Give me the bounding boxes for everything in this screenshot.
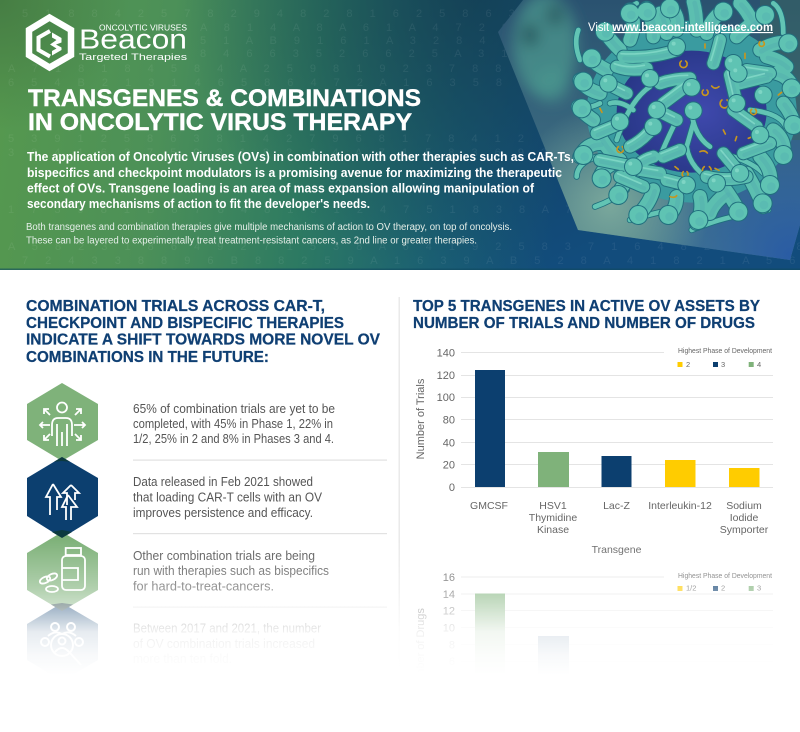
text block: ten fold: more than ten fold. [133,652,232,666]
intro bold paragraph: effect of OVs. Transgene loading is an area of mass expansion allowing manipulation of [27,180,535,196]
y axis values [437,348,455,494]
intro bold paragraph: secondary mechanisms of action to fit the developer's needs. [27,196,370,211]
category labels: GMCSF [470,500,508,512]
text block: other combinations: for hard-to-treat-cancers. [133,580,274,594]
virus illustration [575,2,796,230]
background digit pattern: 5 1 8 8 4 2 5 7 8 2 9 4 8 2 8 1 6 2 5 8 6 3 [22,8,522,20]
text block: CAR-T data: improves persistence and efficacy. [133,506,313,520]
text block: other combinations: Other combination trials are being [133,549,315,563]
background digit pattern: A 7 1 8 1 8 4 5 8 4 A 2 5 9 8 1 9 2 3 7 8 8 1 4 6 2 5 3 7 [8,63,671,75]
intro small paragraph: These can be layered to experimentally treat treatment-resistant cancers, as 2nd line or greater therapies. [26,236,477,246]
right column heading: NUMBER OF TRIALS AND NUMBER OF DRUGS [413,315,755,332]
intro bold paragraph: The application of Oncolytic Viruses (OVs) in combination with other therapies such as CAR-Ts, [27,149,574,164]
hexagon: ten fold increase [27,603,98,681]
right column heading: TOP 5 TRANSGENES IN ACTIVE OV ASSETS BY [413,298,760,315]
category labels: Thymidine [529,512,577,524]
text block: CAR-T data [133,475,323,520]
icon: people and magnifier [41,623,83,665]
left column heading: CHECKPOINT AND BISPECIFIC THERAPIES [26,315,344,332]
logo wordmark: Beacon [79,24,187,54]
text block: CAR-T data: that loading CAR-T cells with an OV [133,490,323,504]
background digit pattern: A 8 1 4 A 8 A 6 1 A 4 7 2 9 1 [200,22,538,34]
intro bold paragraph: bispecifics and checkpoint modulators is a promising avenue for maximizing the therapeutic [27,165,562,180]
y axis values: 14 [443,589,455,601]
text block: ten fold: of OV combination trials increased [133,637,315,651]
text block: other combinations: run with therapies such as bispecifics [133,564,329,578]
y axis values: 10 [443,622,455,634]
icon: bottle and pills [39,548,85,592]
banner background [0,0,800,270]
header banner [0,0,800,270]
y axis title: Number of Trials [415,378,427,459]
category labels: Iodide [730,512,758,524]
category labels: Sodium [726,500,762,512]
text block: trial completion: 65% of combination trials are yet to be [133,402,335,416]
legend: 3 [757,584,761,592]
y axis values: 12 [443,606,455,618]
text block: ten fold [133,622,321,666]
intro small paragraph [26,222,512,246]
y axis values: 80 [443,414,455,426]
logo [29,18,187,68]
chart gridlines [461,576,773,662]
background digit pattern: 8 4 6 6 3 5 2 6 6 2 5 A 3 1 8 4 7 [200,48,584,60]
y axis values [443,572,455,668]
left column heading [26,298,380,366]
y axis values: 140 [437,348,455,360]
y axis values: 20 [443,460,455,472]
left column heading: INDICATE A SHIFT TOWARDS MORE NOVEL OV [26,332,380,348]
y axis values: 6 [449,656,455,668]
bar chart: number of drugs [415,570,776,692]
website link: Visit www.beacon-intelligence.com [588,22,773,34]
logo wordmark: Targeted Therapies [79,52,187,63]
virus backdrop panel [498,0,800,260]
text block: trial completion: 1/2, 25% in 2 and 8% in Phases 3 and 4. [133,432,334,446]
main title: TRANSGENES & COMBINATIONS [28,85,421,112]
background digit pattern: 1 7 3 9 8 1 B 8 7 8 4 8 1 3 1 2 4 7 5 1 8 3 8 A 7 5 8 4 6 9 1 4 [8,204,741,216]
hexagon: other combinations [27,530,98,611]
background digit pattern: 6 5 4 B 2 1 3 1 4 6 5 8 6 4 7 2 A 1 6 3 5 8 2 9 [8,77,555,89]
text block: other combinations [133,549,329,594]
legend: 1/2 [686,584,696,592]
intro bold paragraph [27,149,574,211]
y axis values: 120 [437,370,455,382]
legend [664,570,776,592]
legend: 4 [757,360,761,369]
legend: Highest Phase of Development [678,346,773,355]
background digit pattern: 3 8 4 1 6 2 7 5 9 3 1 8 2 6 4 A 7 1 5 8 3 6 9 2 [8,147,554,159]
y axis values: 40 [443,438,455,450]
legend: 3 [721,360,725,369]
x axis title: Transgene [592,544,642,556]
bars [475,370,760,487]
logo wordmark [79,24,187,63]
background digit pattern [8,8,800,267]
y axis title: Number of Drugs [415,608,427,692]
category labels: Symporter [720,524,769,536]
left column heading: COMBINATION TRIALS ACROSS CAR-T, [26,298,325,315]
text block: ten fold: Between 2017 and 2021, the number [133,622,321,636]
y axis values: 100 [437,392,455,404]
category labels: Interleukin-12 [648,500,712,512]
text block: trial completion: completed, with 45% in Phase 1, 22% in [133,417,333,431]
right column heading [413,298,760,332]
legend: 2 [686,360,690,369]
hexagon: combination trials [27,383,98,461]
category labels: Lac-Z [603,500,631,512]
y axis values: 16 [443,572,455,584]
legend [664,346,776,372]
intro small paragraph: Both transgenes and combination therapies give multiple mechanisms of action to OV therapy, on top of oncolysis. [26,222,512,233]
y axis values: 8 [449,640,455,652]
category labels: Kinase [537,524,569,536]
main title: IN ONCOLYTIC VIRUS THERAPY [28,109,412,136]
legend: Highest Phase of Development [678,571,773,580]
background digit pattern: 5 1 A B 9 1 6 1 A 3 2 8 4 1 7 5 [200,35,562,47]
chart gridlines [461,352,773,488]
hexagon: CAR-T persistence [27,457,98,538]
logo hexagon mark [29,18,71,68]
text block: trial completion [133,402,335,446]
logo wordmark: ONCOLYTIC VIRUSES [99,24,187,32]
bar chart: number of trials [415,346,776,556]
y axis values: 0 [449,482,455,494]
icon: rising arrows [46,484,79,520]
legend: 2 [721,584,725,592]
bars [475,594,569,684]
text block: CAR-T data: Data released in Feb 2021 showed [133,475,313,489]
background digit pattern: 5 3 9 1 2 5 8 6 3 8 1 4 2 7 9 6 8 1 7 8 4 1 2 3 6 [8,133,577,145]
category labels [470,500,769,536]
category labels: HSV1 [539,500,567,512]
main title [28,85,421,136]
icon: person with radiating arrows [40,402,85,446]
blurred background virus [513,0,577,103]
left column heading: COMBINATIONS IN THE FUTURE: [26,349,269,366]
